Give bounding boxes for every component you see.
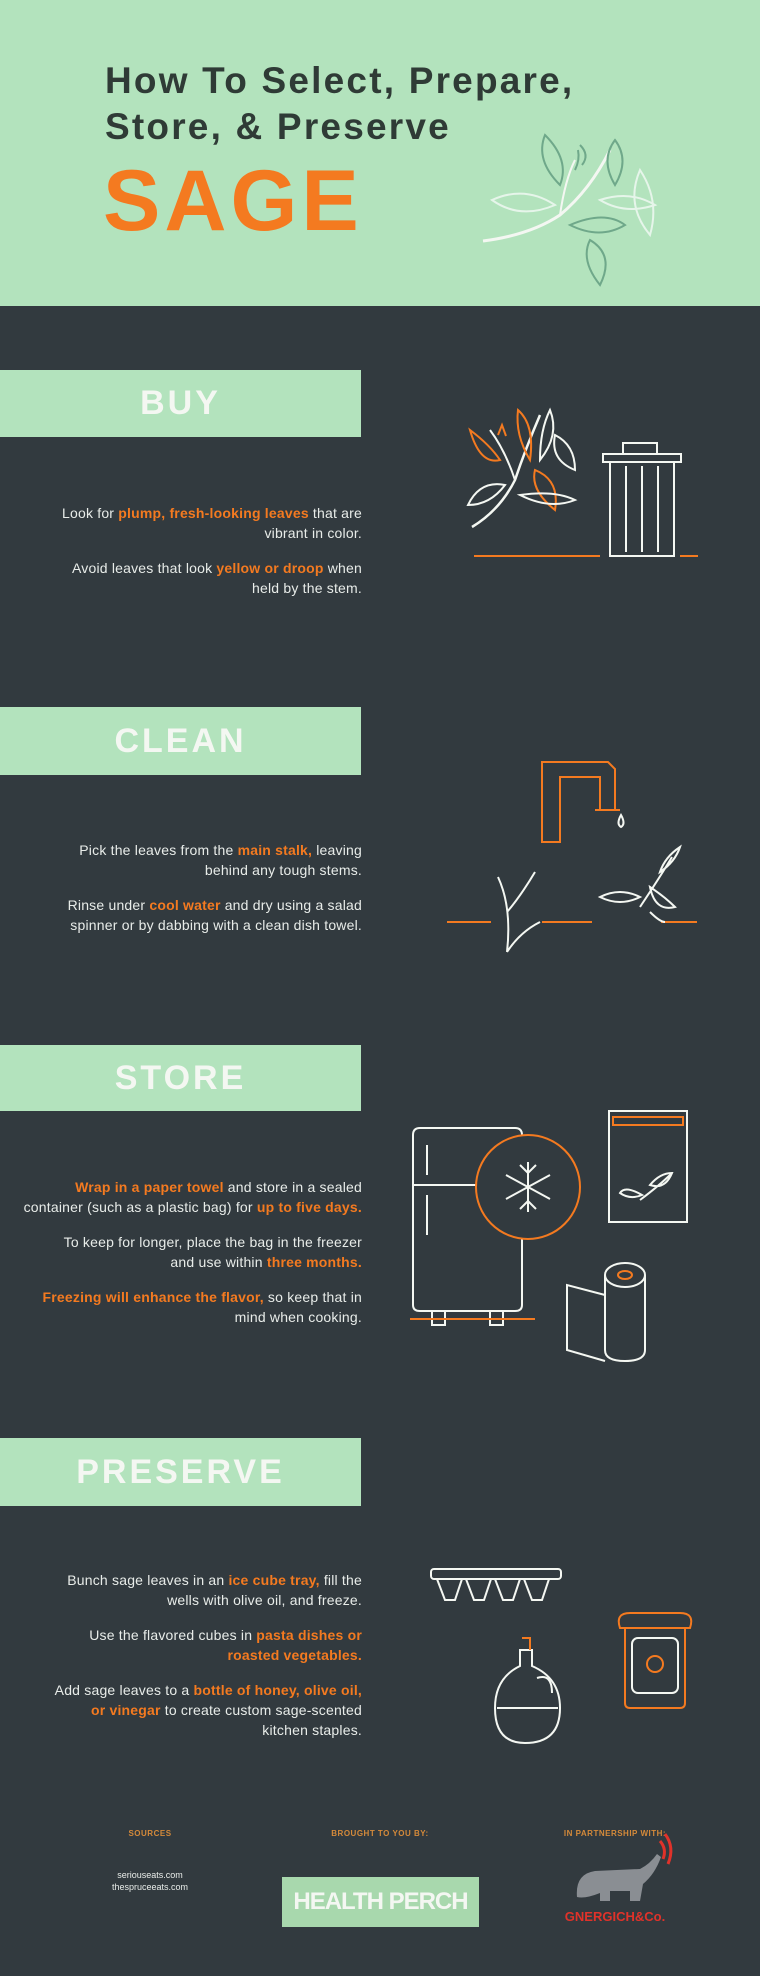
- text: preserve tips: Use the flavored cubes in pasta dishes or: [89, 1627, 362, 1643]
- text: buy tips: held by the stem.: [252, 580, 362, 596]
- text: store tips: Wrap in a paper towel and store in a sealed: [75, 1179, 362, 1195]
- text: clean tips: spinner or by dabbing with a clean dish towel.: [70, 917, 362, 933]
- footer: brought to you by: [282, 1829, 479, 1927]
- heading: STORE: STORE: [115, 1059, 246, 1097]
- header panel: [0, 0, 760, 306]
- label: in partnership with: IN PARTNERSHIP WITH:: [564, 1829, 666, 1838]
- icon: sprig and trash can: [466, 408, 698, 557]
- label: sources: SOURCES: [128, 1829, 172, 1838]
- text: source list: thespruceeats.com: [112, 1882, 188, 1892]
- text: store tips: Freezing will enhance the flavor, so keep that in: [43, 1289, 362, 1305]
- text: store tips: [24, 1179, 362, 1325]
- heading: STORE: [0, 1045, 361, 1111]
- text: store tips: and use within three months.: [170, 1254, 362, 1270]
- text: preserve tips: wells with olive oil, and freeze.: [167, 1592, 362, 1608]
- text: buy tips: Avoid leaves that look yellow or droop when: [72, 560, 362, 576]
- text: clean tips: Pick the leaves from the main stalk, leaving: [79, 842, 362, 858]
- heading: CLEAN: CLEAN: [114, 722, 247, 760]
- text: preserve tips: Bunch sage leaves in an ice cube tray, fill the: [67, 1572, 362, 1588]
- heading: PRESERVE: PRESERVE: [76, 1453, 285, 1491]
- heading: CLEAN: [0, 707, 361, 775]
- text: preserve tips: [54, 1572, 362, 1738]
- text: preserve tips: kitchen staples.: [262, 1722, 362, 1738]
- panel: store: [0, 1045, 688, 1362]
- heading: BUY: BUY: [140, 384, 221, 422]
- text: source list: [112, 1870, 188, 1892]
- footer: sources: [112, 1829, 188, 1892]
- text: clean tips: Rinse under cool water and dry using a salad: [68, 897, 362, 913]
- text: preserve tips: Add sage leaves to a bottle of honey, olive oil,: [55, 1682, 362, 1698]
- logo: health perch: [282, 1877, 479, 1927]
- panel: preserve: [0, 1438, 692, 1744]
- panel: buy: [0, 370, 698, 596]
- title line 2: Store, & Preserve: [105, 106, 451, 147]
- text: buy tips: vibrant in color.: [264, 525, 362, 541]
- heading: BUY: [0, 370, 361, 437]
- label: brought to you by: BROUGHT TO YOU BY:: [331, 1829, 429, 1838]
- text: preserve tips: roasted vegetables.: [227, 1647, 362, 1663]
- text: store tips: container (such as a plastic bag) for up to five days.: [24, 1199, 362, 1215]
- text: clean tips: [68, 842, 362, 933]
- icon: faucet, stem, sprig: [447, 761, 697, 952]
- title line 1: How To Select, Prepare,: [105, 60, 574, 101]
- footer: partnership: [564, 1829, 672, 1924]
- title SAGE: SAGE: [103, 153, 363, 249]
- text: preserve tips: or vinegar to create custom sage-scented: [91, 1702, 362, 1718]
- text: buy tips: [62, 505, 362, 596]
- panel: clean: [0, 707, 697, 952]
- text: store tips: To keep for longer, place the bag in the freezer: [64, 1234, 362, 1250]
- logo: gnergich: [565, 1833, 672, 1924]
- logo: health perch: HEALTH PERCH: [293, 1888, 468, 1915]
- text: clean tips: behind any tough stems.: [205, 862, 362, 878]
- icon: fridge, bag, paper towel: [410, 1110, 688, 1362]
- icon: ice tray, jar, bottle: [430, 1568, 692, 1744]
- text: store tips: mind when cooking.: [235, 1309, 362, 1325]
- text: buy tips: Look for plump, fresh-looking leaves that are: [62, 505, 362, 521]
- logo: gnergich: GNERGICH&Co.: [565, 1909, 665, 1924]
- icon: header sprig: [482, 133, 658, 287]
- text: source list: seriouseats.com: [117, 1870, 183, 1880]
- heading: PRESERVE: [0, 1438, 361, 1506]
